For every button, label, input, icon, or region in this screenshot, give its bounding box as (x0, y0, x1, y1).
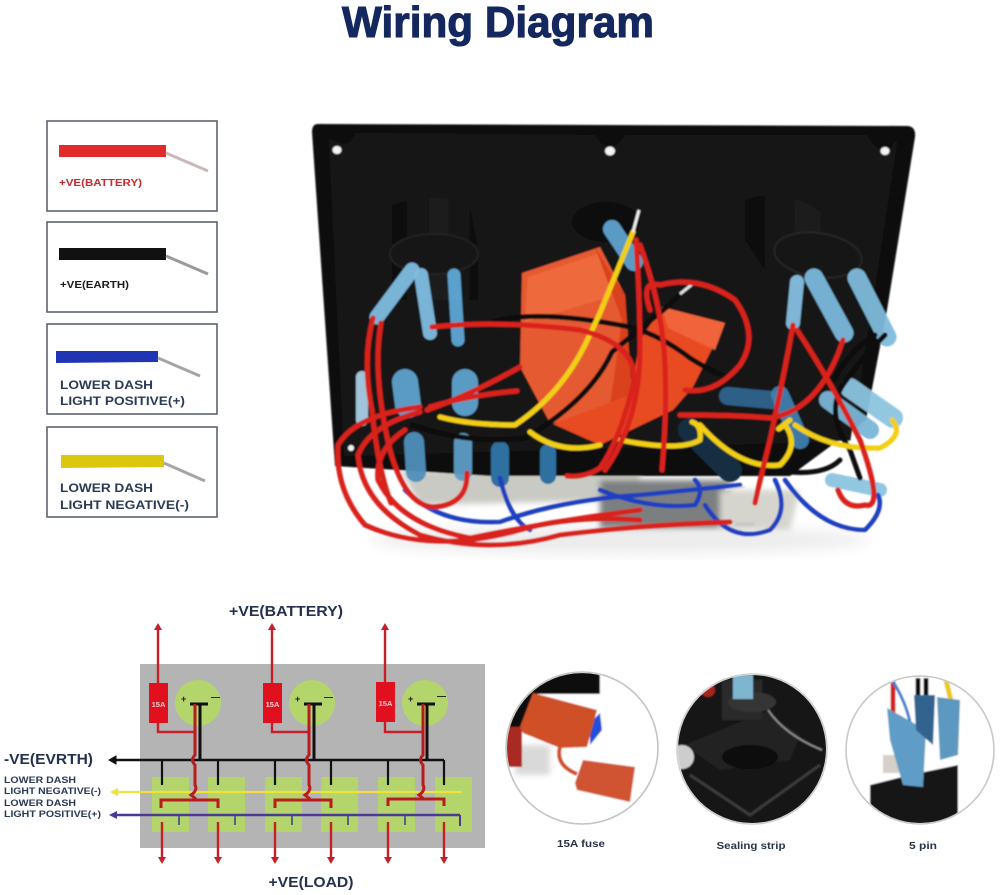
label: earth: -VE(EVRTH) (4, 751, 93, 768)
wires: red (338, 240, 874, 545)
schematic: wiring diagram (109, 623, 485, 864)
wires: yellow (440, 210, 896, 466)
label: battery: +VE(BATTERY) (229, 603, 343, 620)
label: light negative: LOWER DASH (4, 775, 76, 786)
blue terminals (362, 229, 893, 490)
load output arrows (162, 822, 444, 858)
legend: earth wire: +VE(EARTH) (60, 279, 129, 291)
legend: lower dash light negative wire: LOWER DASH (60, 481, 153, 495)
caption: sealing strip: Sealing strip (716, 841, 786, 852)
legend: lower dash light positive wire (47, 324, 217, 414)
floor shadow (370, 526, 870, 554)
legend: lower dash light negative wire: LIGHT NEGATIVE(-) (60, 498, 189, 512)
socket polarity marks: + (295, 694, 300, 704)
photo: wired switch panel (312, 124, 915, 554)
detail circle: sealing strip (670, 672, 830, 827)
socket polarity marks: — (211, 692, 220, 702)
detail circle: 15A fuse (505, 670, 660, 825)
legend: lower dash light positive wire: LOWER DASH (60, 378, 153, 392)
socket polarity marks: — (437, 691, 446, 701)
red feeds to switches (161, 704, 444, 808)
label: light negative: LIGHT NEGATIVE(-) (4, 786, 101, 797)
wires: blue (405, 478, 880, 534)
panel plate (312, 124, 915, 476)
label: light positive: LOWER DASH (4, 798, 76, 809)
socket polarity marks: + (181, 694, 186, 704)
switch modules (152, 680, 472, 832)
label: light negative (4, 775, 101, 797)
label: light positive: LIGHT POSITIVE(+) (4, 809, 101, 820)
15A fuses: 15A (266, 700, 280, 709)
connector tips (725, 487, 755, 526)
legend: battery wire: +VE(BATTERY) (59, 177, 142, 189)
caption: 15A fuse: 15A fuse (557, 839, 605, 850)
detail circle: 5 pin (845, 675, 995, 825)
legend: battery wire (47, 121, 217, 211)
black earth bus (109, 704, 444, 785)
fuse holders (520, 247, 725, 445)
socket polarity marks: — (324, 692, 333, 702)
caption: 5 pin: 5 pin (909, 841, 937, 852)
surface under panel (400, 470, 800, 530)
schematic board (140, 664, 485, 848)
sockets (371, 175, 865, 300)
15A fuses: 15A (152, 700, 166, 709)
wires: black (412, 282, 885, 478)
socket polarity marks: + (408, 694, 413, 704)
battery feed arrows (158, 625, 423, 732)
yellow bus (110, 788, 462, 796)
label: light positive (4, 798, 101, 820)
15A fuses: 15A (379, 699, 393, 708)
15A fuses (149, 682, 395, 723)
legend: lower dash light positive wire: LIGHT POSITIVE(+) (60, 394, 185, 408)
socket polarity marks (181, 691, 446, 704)
legend: earth wire (47, 222, 217, 312)
purple bus (109, 811, 460, 826)
legend: lower dash light negative wire (47, 427, 217, 517)
label: load: +VE(LOAD) (268, 874, 354, 891)
